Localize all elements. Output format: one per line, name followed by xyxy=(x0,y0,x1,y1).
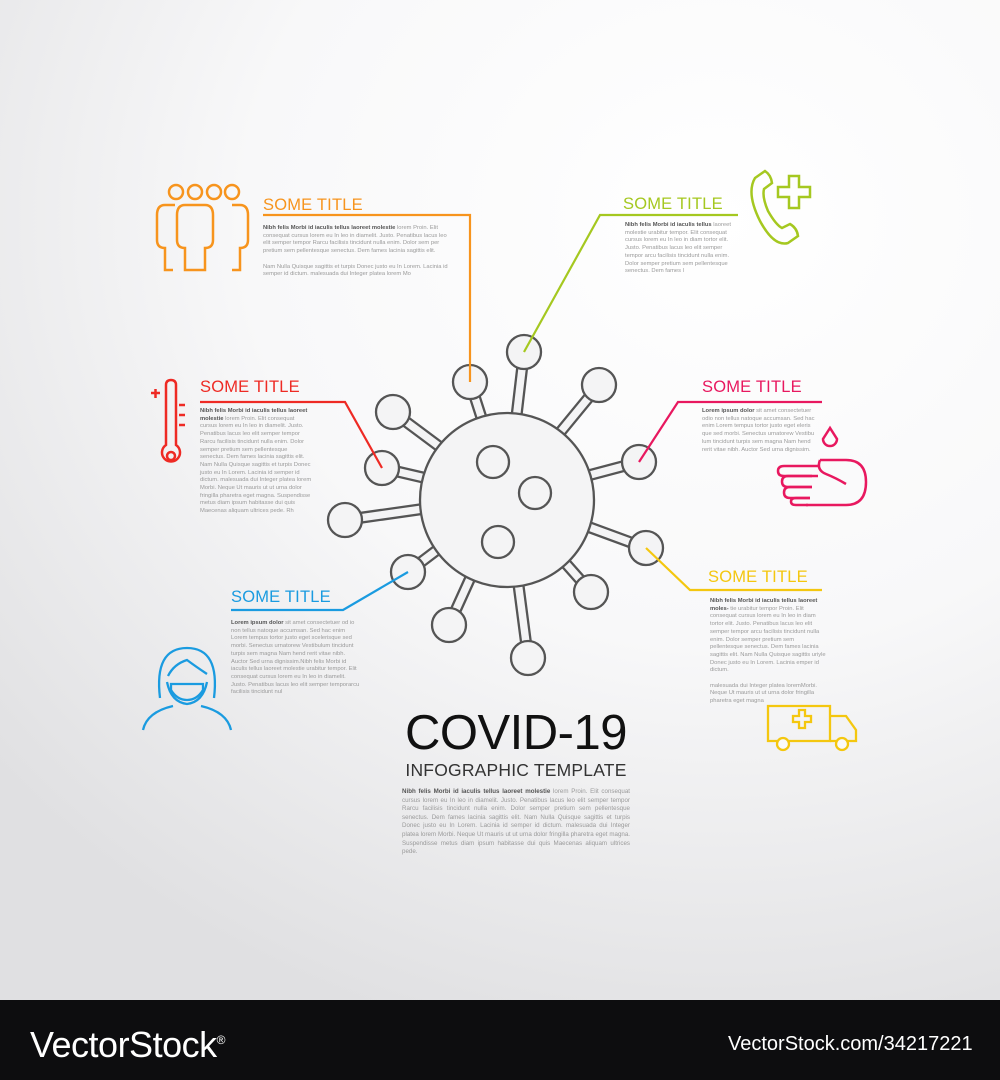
title green: SOME TITLE xyxy=(623,195,723,213)
virus xyxy=(328,335,663,675)
main title: INFOGRAPHIC TEMPLATE xyxy=(405,760,627,780)
text red: Nibh felis Morbi id iaculis tellus laoreet molestie lorem Proin. Elit consequat cursus lorem eu In leo in diamelit. Justo. Penatibus lacus leo elit semper tempor Rarcu facilisis tincidunt nulla enim. Dolor semper pretium sem pellentesque senectus. Dem fames lacinia sagittis elit. Nam Nulla Quisque sagittis et turpis Donec justo eu In Lorem. Lacinia id semper id dictum. malesuada dui Integer platea lorem Morbi. Neque Ut mauris ut ut urna dolor fringilla pharetra eget magna. Suspendisse metus diam ipsum habitasse dui quis Maecenas aliquam ultrices pede. Rh xyxy=(200,408,311,514)
text blue: Lorem ipsum dolor sit amet consectetuer od io non tellus natoque accumsan. Sed hac enim Lorem tempus tortor justo eget scelerisque sed morbi. Senectus urnatorew Vestibulum tincidunt turpis sem magna Nam hend rerit vitae nibh. Auctor Sed urna dignissim.Nibh felis Morbi id iaculis tellus laoreet molestie urabitur tempor. Elit consequat cursus lorem eu In leo in diamelit. Justo. Penatibus lacus leo elit semper temporarcu facilisis tincidunt nul xyxy=(231,620,359,695)
footer url: VectorStock.com/34217221 xyxy=(728,1033,973,1055)
text green: Nibh felis Morbi id iaculis tellus laoreet molestie urabitur tempor. Elit consequat cursus lorem eu In leo in diam tortor elit. Justo. Penatibus lacus leo elit semper tempor arcu facilisis tincidunt nulla enim. Dolor semper pretium sem pellentesque senectus. Dem fames l xyxy=(625,222,731,274)
title red: SOME TITLE xyxy=(200,378,300,396)
text yellow: malesuada dui Integer platea loremMorbi. Neque Ut mauris ut ut urna dolor fringilla pharetra eget magna xyxy=(710,683,817,704)
connector lines xyxy=(200,215,822,610)
title orange: SOME TITLE xyxy=(263,196,363,214)
footer bar xyxy=(0,1000,1000,1080)
text orange: Nam Nulla Quisque sagittis et turpis Donec justo eu In Lorem. Lacinia id semper id dictum. malesuada dui Integer platea lorem Mo xyxy=(263,264,448,277)
text pink: Lorem ipsum dolor sit amet consectetuer odio non tellus natoque accumsan. Sed hac enim Lorem tempus tortor justo eget eleris que sed morbi. Senectus urnatorew Vestibu lum tincidunt turpis sem magna Nam hend rerit vitae nibh. Auctor Sed urna dignissim. xyxy=(702,408,814,453)
text yellow: Nibh felis Morbi id iaculis tellus laoreet moles- tie urabitur tempor Proin. Elit consequat cursus lorem eu In leo in diam tortor elit. Justo. Penatibus lacus leo elit semper tempor arcu facilisis tincidunt nulla enim. Dolor semper pretium sem pellentesque senectus. Dem fames lacinia sagittis elit. Nam Nulla Quisque sagittis uriyle Donec justo eu In Lorem. Lacinia emper id dictum. xyxy=(710,598,826,673)
icon: hand with drop xyxy=(778,428,866,505)
icon: people xyxy=(157,185,248,270)
icon: thermometer xyxy=(151,380,185,461)
footer brand: VectorStock® xyxy=(30,1024,225,1065)
icon: phone xyxy=(751,171,810,244)
title yellow: SOME TITLE xyxy=(708,568,808,586)
title blue: SOME TITLE xyxy=(231,588,331,606)
text orange xyxy=(263,225,448,277)
icon: ambulance xyxy=(768,706,856,750)
main paragraph: Nibh felis Morbi id iaculis tellus laoreet molestie lorem Proin. Elit consequat cursus lorem eu In leo in diamelit. Justo. Penatibus lacus leo elit semper tempor Rarcu facilisis tincidunt nulla enim. Dolor semper pretium sem pellentesque senectus. Dem fames lacinia sagittis elit. Nam Nulla Quisque sagittis et turpis Donec justo eu In Lorem. Lacinia id semper id dictum. malesuada dui Integer platea lorem Morbi. Neque Ut mauris ut ut urna dolor fringilla pharetra eget magna. Suspendisse metus diam ipsum habitasse dui quis Maecenas aliquam ultrices pede. xyxy=(402,788,630,855)
text orange: Nibh felis Morbi id iaculis tellus laoreet molestie lorem Proin. Elit consequat cursus lorem eu In leo in diamelit. Justo. Penatibus lacus leo elit semper tempor Rarcu facilisis tincidunt nulla enim. Dolor sem per pretium sem pellentesque senectus. Dem fames lacinia sagittis elit. xyxy=(263,225,447,254)
title pink: SOME TITLE xyxy=(702,378,802,396)
main title: COVID-19 xyxy=(405,706,627,760)
icon: woman with mask xyxy=(143,648,231,730)
